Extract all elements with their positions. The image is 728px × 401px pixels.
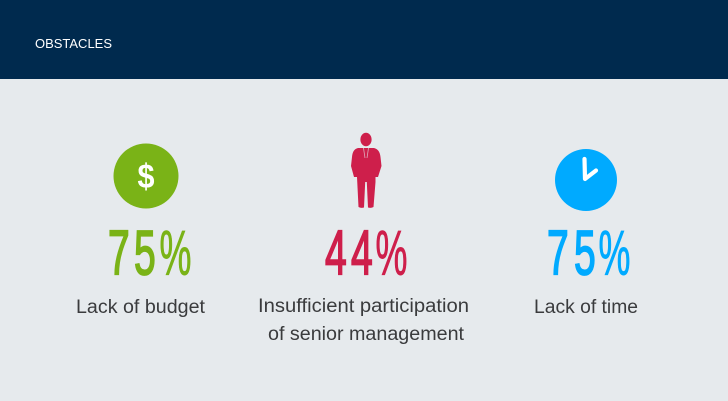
- stat: 44%: %: [376, 218, 407, 288]
- heading: OBSTACLES: [35, 37, 112, 51]
- stat: 75% time: [547, 218, 630, 289]
- panel: insufficient participation: [258, 133, 469, 345]
- icon: businessman: [351, 133, 382, 208]
- stat: 75% time: 7: [547, 219, 569, 289]
- panel: lack of budget: [76, 144, 206, 318]
- label: insufficient participation of senior management: [258, 296, 469, 345]
- icon: dollar coin: [114, 144, 178, 208]
- stat: 75% budget: 5: [134, 219, 156, 289]
- stat: 75% budget: 7: [108, 219, 130, 289]
- stat: 44%: 4: [325, 219, 347, 289]
- label: insufficient participation of senior management: of senior management: [268, 324, 465, 345]
- label: lack of time: Lack of time: [534, 297, 638, 318]
- panel: lack of time: [534, 149, 638, 318]
- header band: [0, 0, 728, 79]
- label: lack of budget: Lack of budget: [76, 297, 206, 318]
- label: insufficient participation of senior management: Insufficient participation: [258, 296, 469, 317]
- stat: 75% budget: [108, 218, 191, 289]
- stat: 75% budget: %: [160, 218, 191, 288]
- stat: 44%: [325, 218, 407, 289]
- icon: clock: [555, 149, 617, 211]
- stat: 75% time: %: [598, 218, 630, 288]
- icon: dollar coin: $: [138, 158, 155, 196]
- stat: 44%: 4: [351, 219, 373, 289]
- stat: 75% time: 5: [574, 219, 596, 289]
